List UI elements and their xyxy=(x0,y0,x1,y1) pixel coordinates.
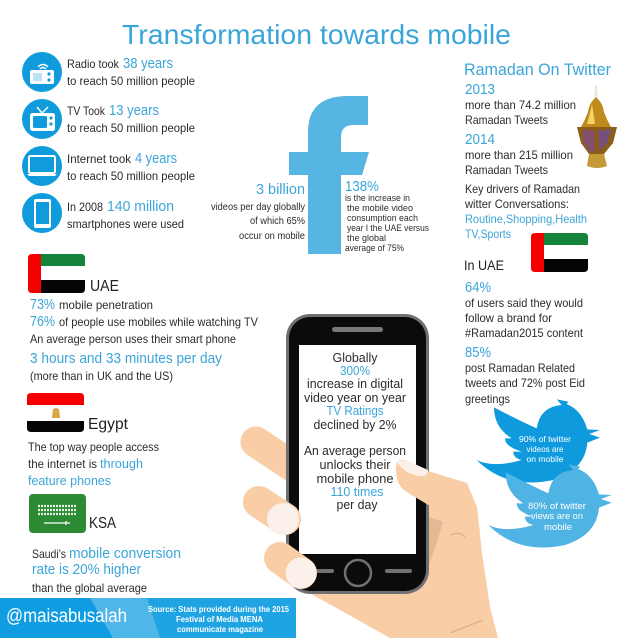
title: Transformation towards mobile xyxy=(122,19,511,50)
text: 138 percent: average of 75% xyxy=(345,243,404,254)
bird text: videos are xyxy=(526,444,564,454)
text: smartphones: In 2008 xyxy=(67,200,103,214)
text: 64 percent: follow a brand for xyxy=(465,311,552,325)
text: key drivers: Key drivers of Ramadan xyxy=(465,182,580,196)
home button xyxy=(345,560,371,586)
phone screen text: increase in digital xyxy=(307,376,403,391)
icon: Twitter bird light xyxy=(488,464,612,547)
text: 3 billion videos: 3 billion xyxy=(256,181,305,198)
text: 2013 stats: more than 74.2 million xyxy=(465,98,576,112)
text: 64 percent: of users said they would xyxy=(465,296,583,310)
text: 2013 stats xyxy=(465,82,576,127)
icon: laptop xyxy=(22,146,62,186)
text: 138 percent: consumption each xyxy=(347,213,418,224)
phone screen text: Globally xyxy=(332,350,378,365)
finger behind phone xyxy=(256,442,292,466)
heading: Ramadan On Twitter xyxy=(464,61,611,79)
icon: Twitter bird dark xyxy=(477,399,600,482)
text: 85 percent: greetings xyxy=(465,392,510,406)
text: KSA stats: Saudi’s xyxy=(32,547,66,561)
source xyxy=(148,605,290,634)
text: 2014 stats: more than 215 million xyxy=(465,148,573,162)
text: key drivers xyxy=(464,182,587,241)
panel: KSA xyxy=(29,494,181,595)
icon: lantern xyxy=(577,85,617,168)
text: 3 billion videos xyxy=(211,181,305,242)
text: internet: Internet took xyxy=(67,152,132,166)
phone screen text: 300% xyxy=(340,363,370,378)
icon: Egypt flag xyxy=(27,393,84,432)
text: KSA stats: than the global average xyxy=(32,581,147,595)
source: Festival of Media MENA xyxy=(176,615,263,624)
text: television xyxy=(67,103,195,135)
text: 138 percent xyxy=(345,178,429,254)
source: Source: Stats provided during the 2015 xyxy=(148,605,290,614)
text: key drivers: TV,Sports xyxy=(465,227,511,241)
bird text: 80% of twitter xyxy=(528,501,586,512)
text: Egypt stats: through xyxy=(100,456,143,471)
illustration: hand holding phone xyxy=(256,314,498,638)
text: UAE stats: 3 hours and 33 minutes per day xyxy=(30,351,223,367)
text: 138 percent: the global xyxy=(347,233,386,244)
text: 2013 stats: Ramadan Tweets xyxy=(465,113,548,127)
text: UAE stats: An average person uses their smart phone xyxy=(30,332,236,346)
bird text: 90% of twitter xyxy=(519,434,571,444)
text: 2014 stats: Ramadan Tweets xyxy=(465,163,548,177)
text: internet: 4 years xyxy=(135,151,177,167)
icon: UAE flag xyxy=(28,254,85,293)
text: 138 percent: the mobile video xyxy=(347,203,413,214)
bird text: on mobile xyxy=(526,454,564,464)
phone xyxy=(286,314,429,594)
text: 2013 stats: 2013 xyxy=(465,82,495,98)
text: key drivers: Routine,Shopping,Health xyxy=(465,212,587,226)
panel: Ramadan on Twitter xyxy=(464,61,617,406)
text: key drivers: witter Conversations: xyxy=(464,197,569,211)
bird text: views are on xyxy=(531,511,583,522)
icon: television xyxy=(22,99,62,139)
phone screen text: An average person xyxy=(304,443,406,458)
text: UAE stats: 76% xyxy=(30,314,55,330)
text: smartphones xyxy=(67,199,184,231)
left soft key xyxy=(312,569,334,573)
phone screen text: declined by 2% xyxy=(314,417,397,432)
text: Egypt stats: feature phones xyxy=(28,473,111,488)
panel: adoption timeline xyxy=(22,52,195,233)
icon: Saudi flag xyxy=(29,494,86,533)
text: 85 percent: post Ramadan Related xyxy=(465,361,575,375)
panel: Egypt xyxy=(27,393,159,488)
text: 138 percent: 138% xyxy=(345,178,379,195)
text: 3 billion videos: videos per day globally xyxy=(211,202,305,213)
handle: @maisabusalah xyxy=(6,606,127,627)
phone screen text: unlocks their xyxy=(320,457,391,472)
palm creases xyxy=(443,508,483,633)
text: 2014 stats: 2014 xyxy=(465,132,495,148)
text: smartphones: 140 million xyxy=(107,199,174,215)
text: internet: to reach 50 million people xyxy=(67,169,195,183)
text: 85 percent: tweets and 72% post Eid xyxy=(465,376,585,390)
phone screen text: video year on year xyxy=(304,390,407,405)
text: radio: 38 years xyxy=(123,56,173,72)
icon: radio xyxy=(22,52,62,92)
screen xyxy=(299,345,416,554)
text: KSA stats: rate is 20% higher xyxy=(32,562,141,578)
bird text xyxy=(528,501,586,533)
text: television: to reach 50 million people xyxy=(67,121,195,135)
text: radio xyxy=(67,56,195,88)
icon: UAE flag xyxy=(531,233,588,272)
text: smartphones: smartphones were used xyxy=(67,217,184,231)
text: internet xyxy=(67,151,195,183)
text: 85 percent xyxy=(465,345,585,406)
text: 138 percent: is the increase in xyxy=(345,193,410,204)
phone screen text: mobile phone xyxy=(316,471,394,486)
text: UAE stats: 73% xyxy=(30,297,55,313)
bird text xyxy=(519,434,571,464)
text: 3 billion videos: of which 65% xyxy=(250,216,305,227)
footer bar xyxy=(0,598,296,638)
text: KSA stats: mobile conversion xyxy=(69,546,181,562)
phone screen text: 110 times xyxy=(330,484,384,499)
palm shadow xyxy=(429,517,443,565)
text: UAE stats: (more than in UK and the US) xyxy=(30,369,173,383)
text: radio: Radio took xyxy=(67,57,120,71)
text: UAE stats xyxy=(30,297,258,383)
text: 3 billion videos: occur on mobile xyxy=(239,231,305,242)
hand palm xyxy=(295,470,498,638)
text: 2014 stats xyxy=(465,132,573,177)
text: UAE stats: of people use mobiles while watching TV xyxy=(59,315,258,329)
right soft key xyxy=(385,569,412,573)
finger with nail xyxy=(259,502,299,535)
lower finger with nail xyxy=(280,558,316,588)
text: television: 13 years xyxy=(109,103,159,119)
text: Egypt stats: the internet is xyxy=(28,457,97,471)
panel: UAE xyxy=(28,254,258,383)
text: 64 percent: #Ramadan2015 content xyxy=(465,326,584,340)
speaker xyxy=(332,327,383,332)
label: UAE: UAE xyxy=(90,278,119,295)
text: UAE stats: mobile penetration xyxy=(59,298,153,312)
icon: smartphone xyxy=(22,193,62,233)
bird text: mobile xyxy=(544,522,572,533)
text: 85 percent: 85% xyxy=(465,345,491,361)
text: Egypt stats: The top way people access xyxy=(28,440,159,454)
phone screen text: per day xyxy=(336,497,378,512)
text: 64 percent xyxy=(465,280,584,340)
phone screen text: TV Ratings xyxy=(326,403,384,418)
text: 138 percent: year I the UAE versus xyxy=(347,223,429,234)
text: Egypt stats xyxy=(28,440,159,488)
label: KSA: KSA xyxy=(89,515,117,532)
label: Egypt: Egypt xyxy=(88,416,129,433)
source: communicate magazine xyxy=(177,625,264,634)
icon: facebook f xyxy=(289,96,369,254)
text: television: TV Took xyxy=(67,104,106,118)
text: 64 percent: 64% xyxy=(465,280,491,296)
text: radio: to reach 50 million people xyxy=(67,74,195,88)
text: KSA stats xyxy=(32,546,181,595)
thumb xyxy=(396,460,480,530)
phone screen text xyxy=(304,350,407,512)
label: in UAE: In UAE xyxy=(464,257,504,273)
